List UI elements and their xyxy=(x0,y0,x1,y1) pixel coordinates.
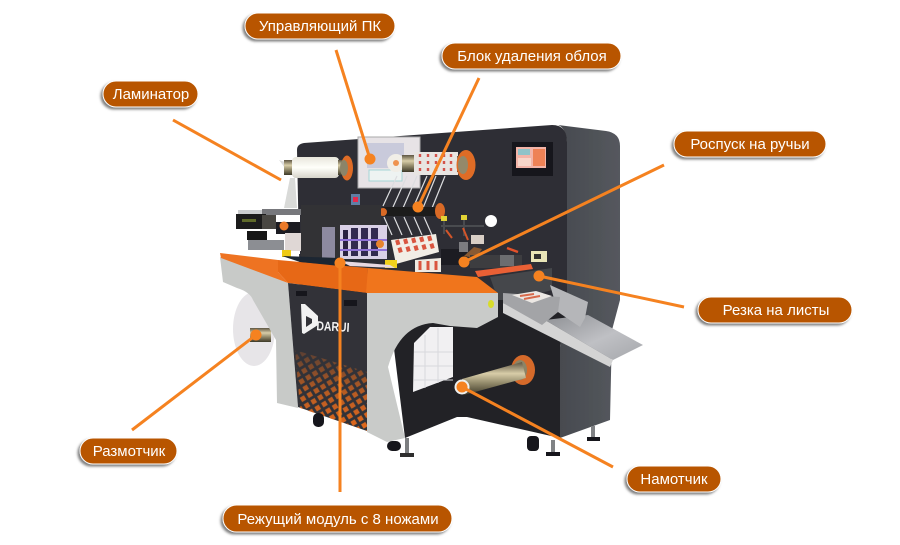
laminator roll xyxy=(279,156,353,208)
vent slots xyxy=(296,291,307,296)
diamond pattern xyxy=(295,350,367,431)
slitting and sheeting station xyxy=(470,248,552,305)
machine illustration xyxy=(220,125,643,457)
sensor arms xyxy=(441,215,484,240)
label web strips xyxy=(383,176,445,235)
screen of control PC xyxy=(358,137,420,188)
callout: Намотчик: Намотчик xyxy=(640,471,708,488)
left grey leg xyxy=(220,257,298,408)
callout: Режущий модуль с 8 ножами: Режущий модуль с 8 ножами xyxy=(237,511,439,528)
callout: Роспуск на ручьи xyxy=(458,131,826,268)
orange worktop xyxy=(220,253,498,293)
left laminator unit xyxy=(236,209,302,257)
brand logo: DARUI xyxy=(316,318,350,335)
callout: Роспуск на ручьи: Роспуск на ручьи xyxy=(690,136,810,153)
callout: Управляющий ПК: Управляющий ПК xyxy=(259,18,381,35)
callout: Режущий модуль с 8 ножами xyxy=(223,258,452,532)
callout: Резка на листы: Резка на листы xyxy=(723,302,829,319)
callout: Блок удаления облоя: Блок удаления облоя xyxy=(457,48,607,65)
callout: Размотчик xyxy=(80,330,262,464)
callout: Намотчик xyxy=(456,382,721,492)
white paper inside arch xyxy=(413,327,453,392)
die cutting housing xyxy=(301,205,381,258)
red button box xyxy=(351,194,360,206)
machine back panel xyxy=(297,125,567,320)
front dark panel xyxy=(288,283,367,431)
touch screen control panel xyxy=(512,142,553,176)
callout: Управляющий ПК xyxy=(245,13,395,164)
lower machine body xyxy=(388,300,567,438)
yellow safety sticker xyxy=(488,300,494,308)
rewinder roll core xyxy=(454,355,535,395)
callout: Блок удаления облоя xyxy=(412,43,621,212)
caster wheels and feet xyxy=(313,413,600,457)
white indicator on panel xyxy=(485,215,497,227)
deburr roller xyxy=(379,203,445,219)
right grey leg with arch xyxy=(367,293,498,442)
callout: Ламинатор xyxy=(103,81,281,180)
upper label roll xyxy=(387,150,476,180)
callout: Размотчик: Размотчик xyxy=(93,443,166,460)
die-cut label sheets xyxy=(385,234,482,272)
sheet output tray xyxy=(503,285,643,367)
warning labels xyxy=(471,235,547,262)
unwinder roll xyxy=(233,292,275,366)
brand logo xyxy=(301,304,350,335)
callout: Ламинатор: Ламинатор xyxy=(113,86,189,103)
cutting module xyxy=(340,225,387,259)
machine side wall xyxy=(558,125,620,438)
callout: Резка на листы xyxy=(534,270,852,323)
